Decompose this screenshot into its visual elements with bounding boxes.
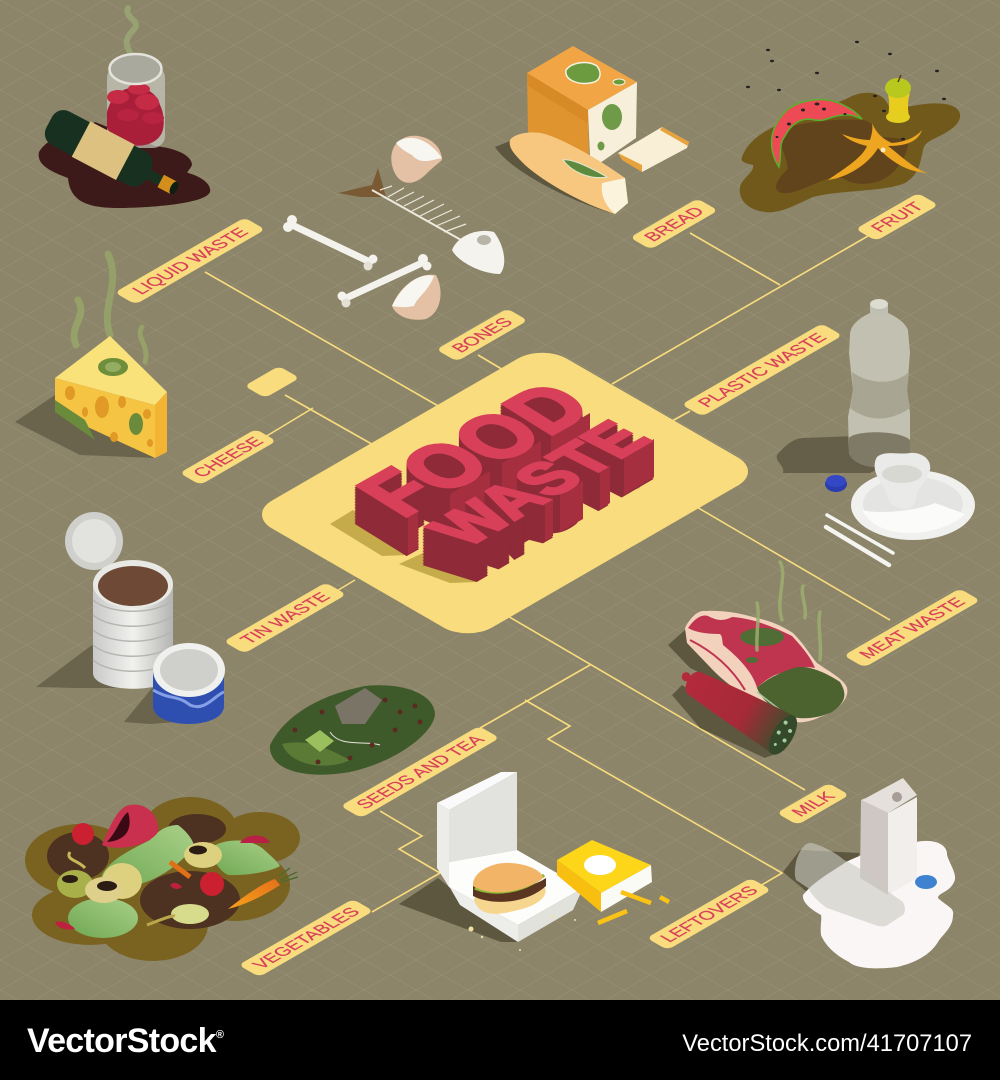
platform title: FOOD WASTE: WASTE [413,420,666,563]
icon: burger leftovers [399,772,669,951]
platform title: FOOD WASTE: FOOD [338,407,612,565]
icon: liquid waste (jar and wine bottle) [39,8,210,208]
platform title: FOOD WASTE: FOOD [338,393,612,552]
label: blank chip [244,366,300,398]
platform title: FOOD WASTE: FOOD [338,401,612,559]
footer brand: VectorStock [27,1022,216,1060]
platform title: FOOD WASTE: WASTE [413,424,666,567]
platform title: FOOD WASTE [330,370,666,593]
platform title: FOOD WASTE: WASTE [413,426,666,569]
icon: bread [495,46,689,214]
platform title: FOOD WASTE: FOOD [338,374,612,532]
icon: fruit waste [740,41,960,212]
label: fruit [855,193,939,241]
label: tin waste [224,582,346,654]
platform title: FOOD WASTE: FOOD [338,380,612,538]
platform title: FOOD WASTE: FOOD [338,386,612,544]
label: bread: BREAD [639,204,709,244]
label: leftovers: LEFTOVERS [655,883,763,945]
platform title: FOOD WASTE: FOOD [338,378,612,537]
platform title: FOOD WASTE: WASTE [413,417,666,560]
platform title: FOOD WASTE: WASTE [413,427,666,570]
platform title: FOOD WASTE: FOOD [338,408,612,567]
platform title: FOOD WASTE: WASTE [413,429,666,572]
platform title: FOOD WASTE: WASTE [413,447,666,590]
platform title: FOOD WASTE: FOOD [338,375,612,534]
platform title: FOOD WASTE: FOOD [338,404,612,562]
label: cheese: CHEESE [188,434,268,480]
platform title: FOOD WASTE: WASTE [413,436,666,579]
platform title: FOOD WASTE: WASTE [413,414,666,557]
platform title: FOOD WASTE: WASTE [413,444,666,587]
platform title: FOOD WASTE: FOOD [338,381,612,540]
label: milk [777,783,849,825]
platform title: FOOD WASTE: FOOD [338,372,612,531]
platform title: FOOD WASTE: FOOD [338,384,612,543]
central platform [248,344,762,642]
platform title: FOOD WASTE: WASTE [413,439,666,582]
footer url: VectorStock.com/41707107 [682,1031,972,1057]
platform title: FOOD WASTE: FOOD [338,377,612,535]
label: liquid waste: LIQUID WASTE [127,225,253,297]
platform title: FOOD WASTE: WASTE [413,421,666,564]
platform title: FOOD WASTE: FOOD [338,370,612,529]
platform title: FOOD WASTE: WASTE [413,445,666,588]
platform title: FOOD WASTE: FOOD [338,399,612,558]
platform title: FOOD WASTE: FOOD [338,392,612,550]
platform title: FOOD WASTE: FOOD [338,387,612,546]
platform title: FOOD WASTE: WASTE [413,415,666,558]
platform title: FOOD WASTE: WASTE [413,430,666,573]
platform title: FOOD WASTE: WASTE [413,448,666,591]
label: fruit: FRUIT [866,199,928,235]
platform title: FOOD WASTE: FOOD [338,402,612,561]
label: vegetables: VEGETABLES [248,904,364,972]
platform title: FOOD WASTE: FOOD [338,389,612,547]
platform title: FOOD WASTE: WASTE [413,435,666,578]
label: liquid waste [115,218,265,304]
icon: meat waste [668,562,847,759]
platform title: FOOD WASTE: FOOD [338,398,612,556]
platform title: FOOD WASTE: WASTE [413,423,666,566]
icon: bones, fish skeleton and eggshells [283,136,504,320]
icon: mouldy cheese [15,254,167,458]
label: milk: MILK [787,789,840,819]
connector lines [205,233,890,912]
label: meat waste: MEAT WASTE [854,595,970,661]
label: bones: BONES [447,315,517,355]
platform title: FOOD WASTE: FOOD [338,390,612,549]
icon: tin cans [36,512,225,724]
platform title: FOOD WASTE: WASTE [413,418,666,561]
platform title: FOOD WASTE: WASTE [413,441,666,584]
footer bar [0,1000,1000,1080]
label: cheese [180,429,276,485]
platform title: FOOD WASTE: FOOD [338,395,612,553]
label: seeds and tea: SEEDS AND TEA [351,732,489,812]
label: bones [436,308,528,362]
platform title: FOOD WASTE: FOOD [338,396,612,555]
platform title: FOOD WASTE: WASTE [413,442,666,585]
label: plastic waste: PLASTIC WASTE [693,330,831,410]
label: tin waste: TIN WASTE [235,589,335,647]
platform title: FOOD WASTE: WASTE [413,433,666,576]
platform title: FOOD WASTE: FOOD [338,383,612,541]
footer brand: ® [216,1029,224,1041]
platform title: FOOD WASTE: WASTE [413,450,666,593]
platform title: FOOD WASTE: WASTE [413,438,666,581]
icon: seeds and tea [270,685,435,775]
icon: plastic waste [777,299,975,565]
platform title: FOOD WASTE: WASTE [413,412,666,555]
icon: spilled milk, carton and bottle [783,778,955,968]
platform title: FOOD WASTE: WASTE [413,432,666,575]
platform title: FOOD WASTE: FOOD [338,405,612,564]
label: bread [630,198,718,250]
icon: rotten vegetables [25,797,300,961]
